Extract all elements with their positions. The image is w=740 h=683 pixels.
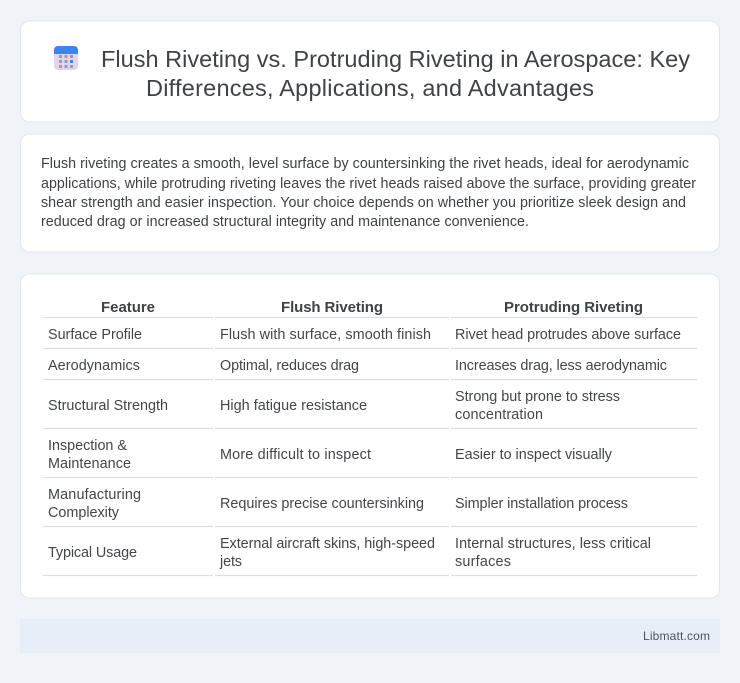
summary text: reduced drag or increased structural integrity and maintenance convenience. xyxy=(41,214,529,230)
row: surface profile: Flush with surface, smooth finish xyxy=(220,327,431,343)
row: structural strength: concentration xyxy=(455,407,543,423)
title text xyxy=(101,46,690,101)
row: aerodynamics: Aerodynamics xyxy=(48,358,140,374)
row: typical usage xyxy=(48,536,651,570)
row: structural strength: Strong but prone to stress xyxy=(455,389,620,405)
footer bar xyxy=(20,619,720,653)
title text: Differences, Applications, and Advantages xyxy=(146,75,594,101)
title text: Flush Riveting vs. Protruding Riveting in Aerospace: Key xyxy=(101,46,690,72)
row: aerodynamics: Optimal, reduces drag xyxy=(220,358,359,374)
row: manufacturing complexity: Manufacturing xyxy=(48,487,141,503)
panel: summary xyxy=(20,134,720,252)
row: aerodynamics xyxy=(48,358,667,374)
row: manufacturing complexity: Requires precise countersinking xyxy=(220,496,424,512)
row: typical usage: External aircraft skins, high-speed xyxy=(220,536,435,552)
title panel xyxy=(20,21,720,122)
table header xyxy=(101,299,643,316)
row: structural strength xyxy=(48,389,620,423)
row: inspection and maintenance: More difficult to inspect xyxy=(220,447,371,463)
row: surface profile xyxy=(48,327,681,343)
row: inspection and maintenance xyxy=(48,438,613,472)
table header: Flush Riveting xyxy=(281,299,383,316)
panel: comparison table xyxy=(20,274,720,598)
row: inspection and maintenance: Maintenance xyxy=(48,456,131,472)
row: typical usage: surfaces xyxy=(455,554,511,570)
row: manufacturing complexity: Complexity xyxy=(48,505,120,521)
summary text: Flush riveting creates a smooth, level surface by countersinking the rivet heads, ideal for aerodynamic xyxy=(41,156,689,172)
row: inspection and maintenance: Easier to inspect visually xyxy=(455,447,613,463)
row: structural strength: High fatigue resistance xyxy=(220,398,367,414)
row: surface profile: Surface Profile xyxy=(48,327,142,343)
row: typical usage: jets xyxy=(219,554,242,570)
row: typical usage: Internal structures, less critical xyxy=(455,536,651,552)
row: structural strength: Structural Strength xyxy=(48,398,168,414)
row: manufacturing complexity xyxy=(48,487,628,521)
row: surface profile: Rivet head protrudes above surface xyxy=(455,327,681,343)
icon: calendar xyxy=(54,46,78,70)
summary text: applications, while protruding riveting leaves the rivet heads raised above the surface, providing greater xyxy=(41,176,696,192)
table header: Feature xyxy=(101,299,155,316)
row: aerodynamics: Increases drag, less aerodynamic xyxy=(455,358,667,374)
row: typical usage: Typical Usage xyxy=(48,545,137,561)
row: manufacturing complexity: Simpler installation process xyxy=(455,496,628,512)
footer text: Libmatt.com xyxy=(643,629,710,643)
row: inspection and maintenance: Inspection & xyxy=(48,438,127,454)
table header: Protruding Riveting xyxy=(504,299,643,316)
summary text: shear strength and easier inspection. Your choice depends on whether you prioritize sleek design and xyxy=(41,195,686,211)
summary text xyxy=(41,156,696,230)
